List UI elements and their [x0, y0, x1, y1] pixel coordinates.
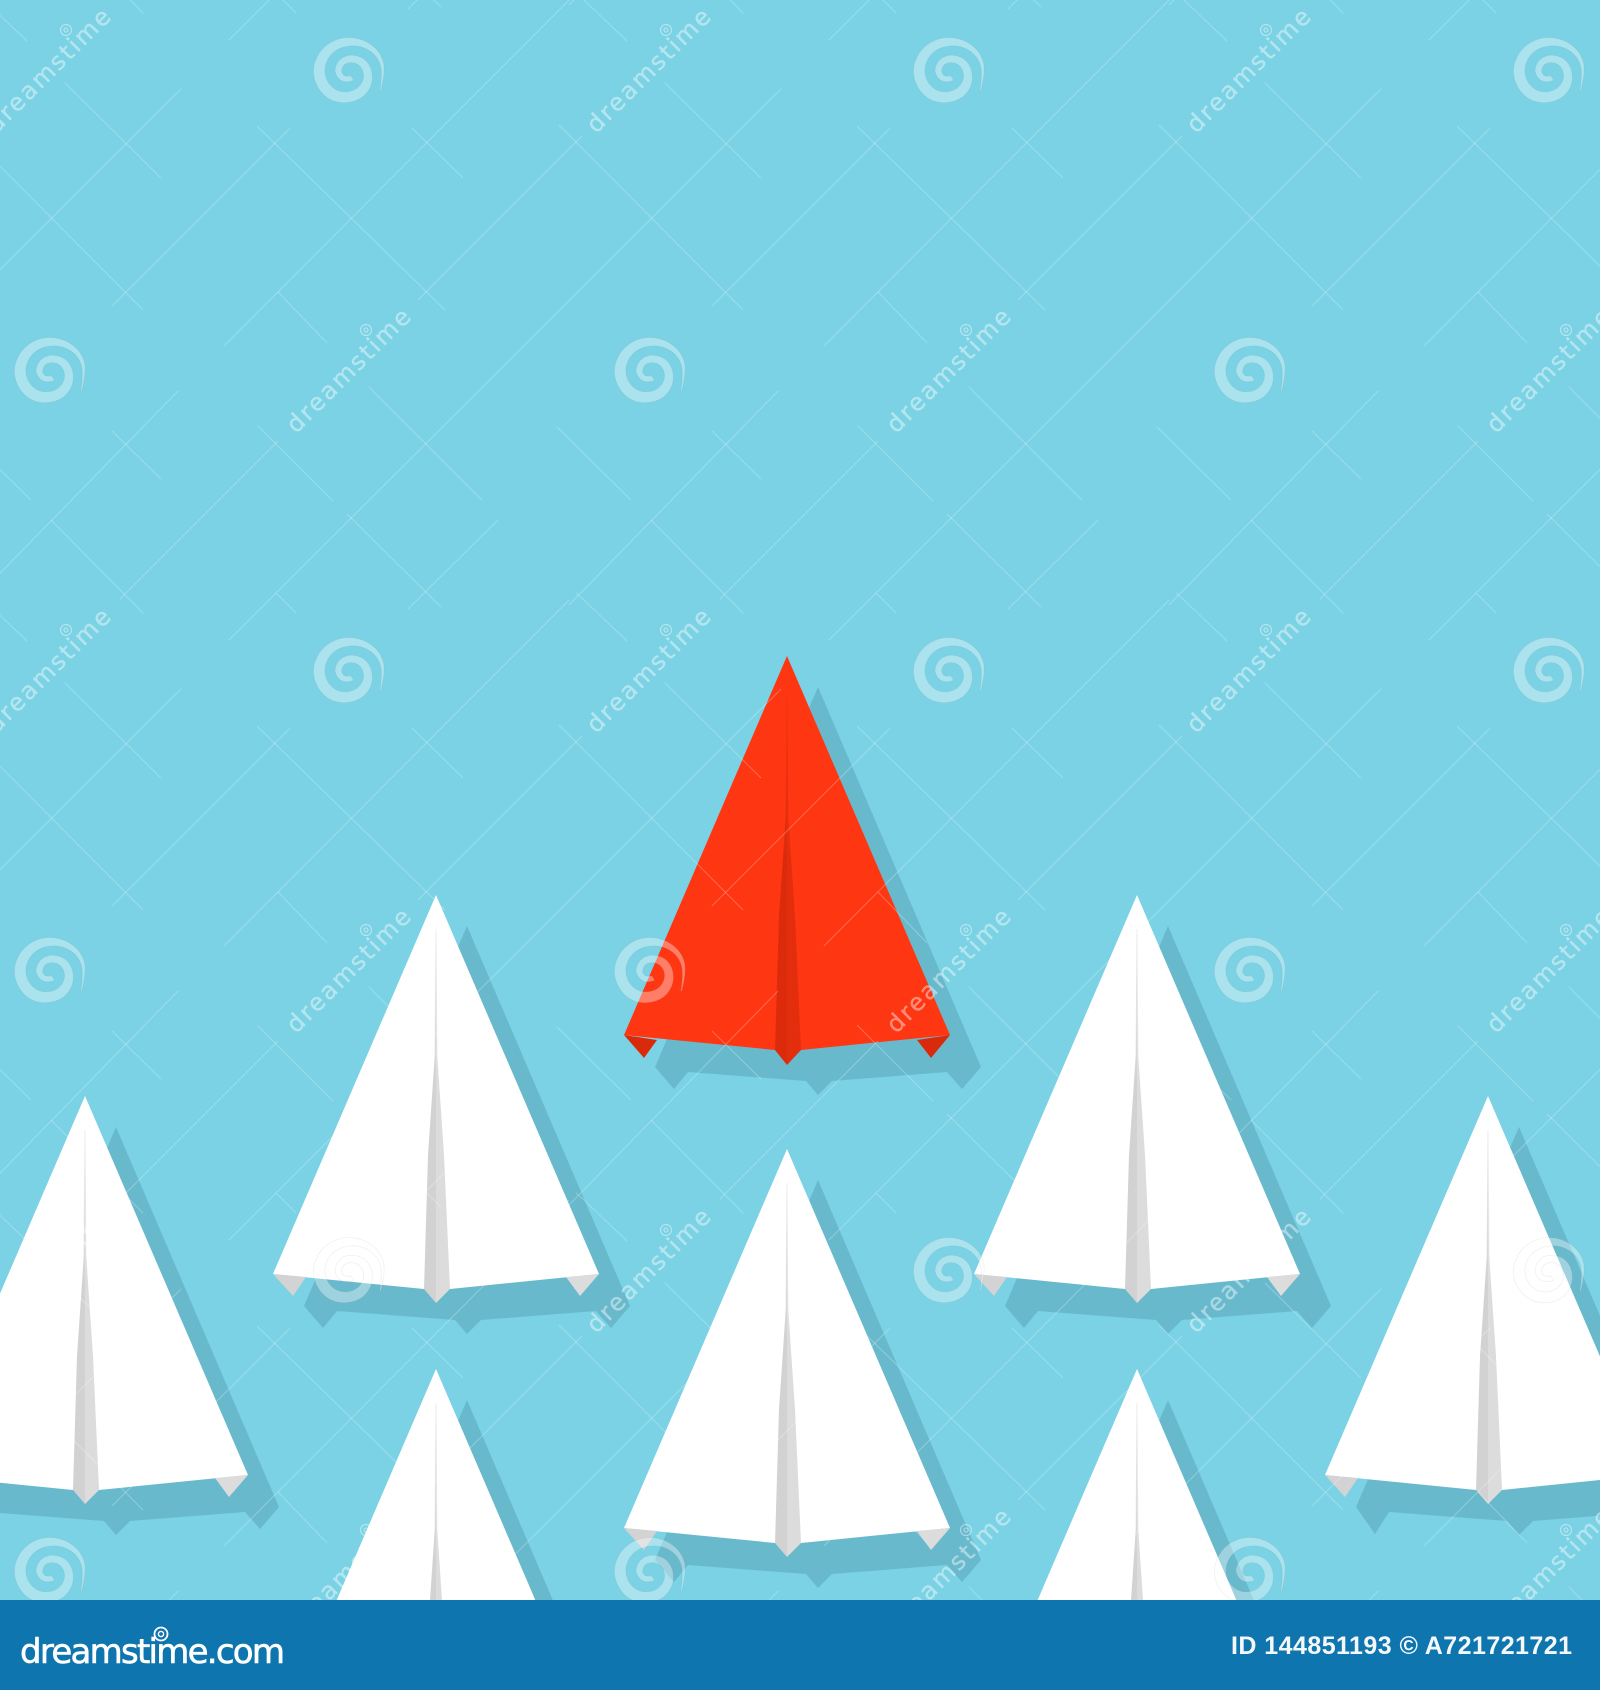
paper plane: white, centre [624, 1149, 981, 1588]
watermark: dreamstime diagonal text: dreamstime [1181, 3, 1316, 138]
paper plane: white, upper right [974, 895, 1331, 1334]
watermark: dreamstime diagonal text: dreamstime [1181, 1203, 1316, 1338]
watermark: dreamstime diagonal text: dreamstime [281, 303, 416, 438]
watermark: dreamstime diagonal text: dreamstime [881, 903, 1016, 1038]
watermark: dreamstime diagonal text: dreamstime [881, 303, 1016, 438]
footer logo text: dreamstime.com [20, 1632, 285, 1672]
watermark: dreamstime diagonal text: dreamstime [581, 1203, 716, 1338]
paper plane: red leader [624, 656, 981, 1095]
paper plane: white, far right [1325, 1096, 1600, 1535]
watermark: dreamstime diagonal text: dreamstime [1181, 603, 1316, 738]
paper plane: white, upper left [273, 895, 630, 1334]
watermark: dreamstime diagonal text: dreamstime [881, 1503, 1016, 1638]
watermark: dreamstime diagonal text: dreamstime [281, 903, 416, 1038]
watermark: dreamstime diagonal text: dreamstime [581, 3, 716, 138]
paper plane: white, bottom left [337, 1369, 553, 1600]
footer image id: ID 144851193 © A721721721 [1231, 1632, 1572, 1660]
watermark: dreamstime diagonal text: dreamstime [281, 1503, 416, 1638]
paper plane: white, far left [0, 1096, 279, 1535]
paper plane: white, bottom right [1038, 1369, 1254, 1600]
footer band [0, 1600, 1600, 1690]
watermark: dreamstime diagonal text: dreamstime [581, 603, 716, 738]
